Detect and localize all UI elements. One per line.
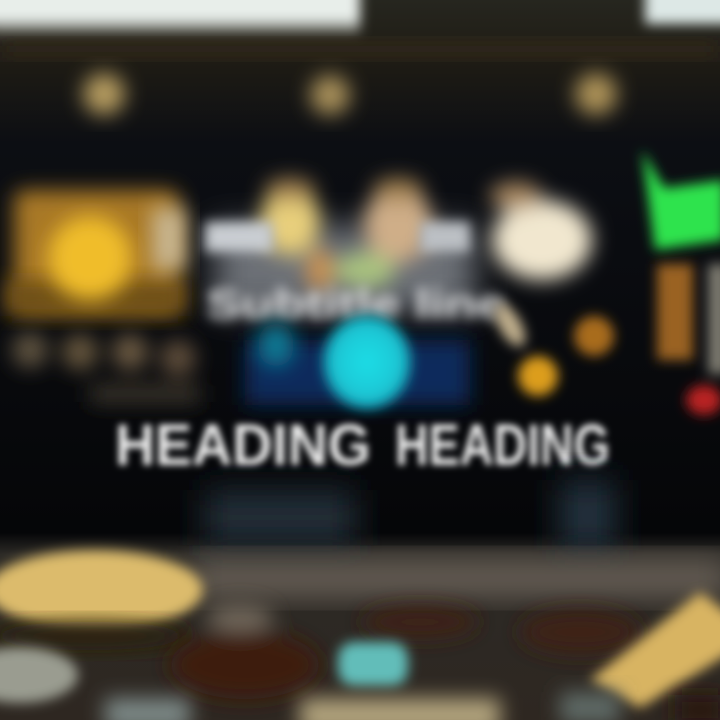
heading text: Subtitle line bbox=[206, 280, 506, 327]
large yellow bread disc bbox=[0, 550, 203, 630]
icon: green arrow chart bbox=[642, 150, 720, 250]
heading icons row bbox=[260, 178, 592, 292]
bold bottom heading: HEADING bbox=[395, 413, 610, 478]
white plate lower left bbox=[0, 647, 78, 703]
chocolate cups bbox=[170, 604, 640, 699]
ceiling beam bbox=[0, 42, 720, 56]
small icon row below folder bbox=[12, 332, 200, 403]
bold bottom heading bbox=[115, 413, 610, 478]
icon: golden folder panel bbox=[5, 190, 186, 316]
icon: cyan circle bbox=[323, 315, 411, 409]
icon: small teal circle bbox=[258, 323, 294, 367]
teal cup bbox=[338, 642, 408, 686]
side bars bbox=[657, 264, 720, 415]
heading text bbox=[205, 222, 506, 327]
lower dim figures bbox=[205, 480, 615, 550]
blue banner bbox=[245, 340, 470, 405]
ceiling lamps bbox=[83, 73, 617, 115]
ceiling windows bbox=[0, 0, 720, 34]
coins bbox=[488, 299, 614, 396]
lower foreground blocks bbox=[105, 692, 720, 720]
dark bread underside bbox=[0, 622, 190, 650]
table surface highlight bbox=[190, 560, 720, 596]
yellow bar lower right bbox=[590, 592, 720, 708]
bold bottom heading: HEADING bbox=[115, 413, 371, 478]
central light panel behind content bbox=[215, 225, 475, 310]
